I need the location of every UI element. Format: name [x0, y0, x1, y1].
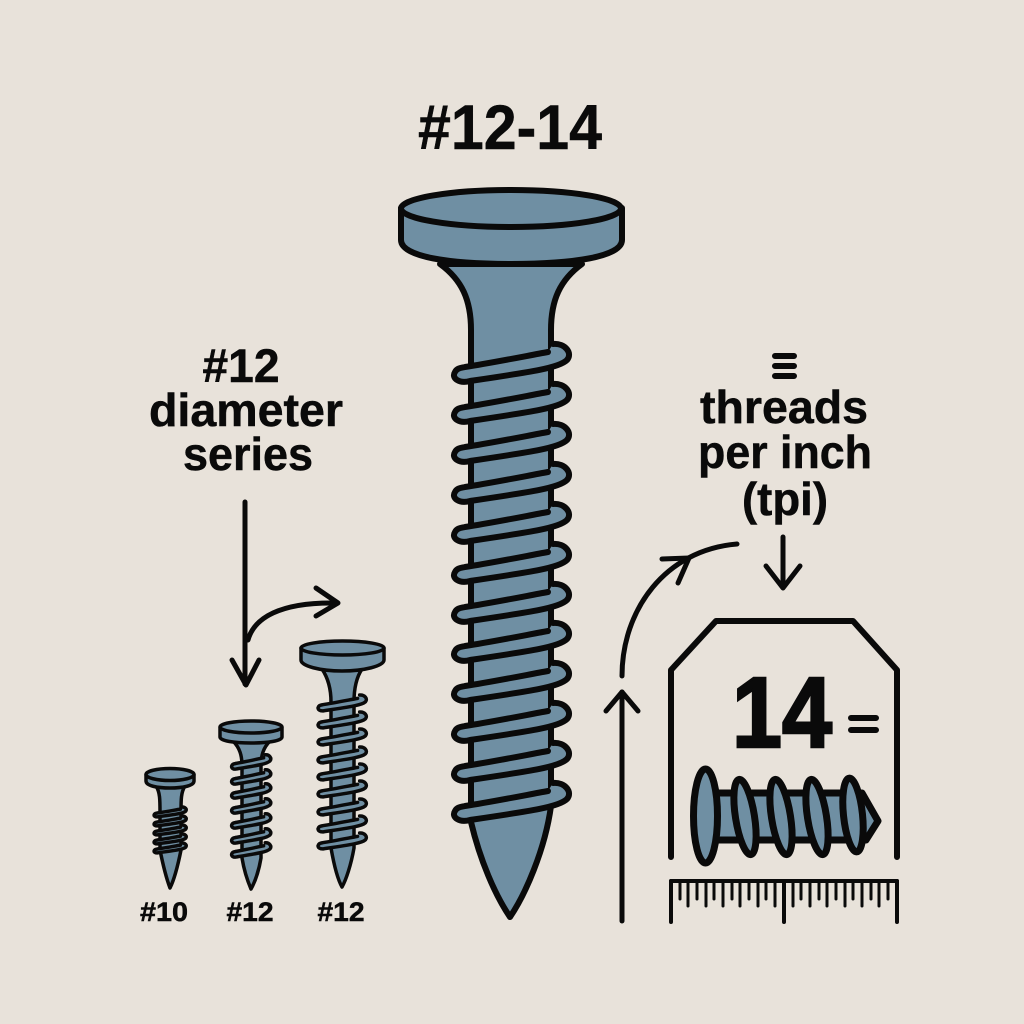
ruler: [671, 881, 897, 922]
panel: tag outline: [671, 621, 897, 857]
arrow: diameter down with branch: [232, 502, 338, 685]
heading: diameter series: #12: [202, 339, 280, 392]
number: 14: 14: [732, 657, 832, 769]
icon: small screw #10: [146, 768, 194, 888]
icon: large screw: [401, 190, 622, 917]
arrow: tall upward curved: [606, 544, 737, 921]
heading: diameter series: diameter: [149, 384, 343, 436]
icon: medium screw #12: [301, 641, 384, 887]
heading: diameter series: series: [183, 428, 313, 480]
heading: threads per inch: threads: [700, 381, 868, 433]
heading: threads per inch: [698, 356, 872, 525]
icon: small screw #12: [220, 721, 282, 889]
arrow: tpi down: [766, 537, 800, 588]
heading: threads per inch: per inch: [698, 426, 872, 478]
label: #12 medium: #12: [318, 897, 364, 927]
heading: diameter series: [149, 339, 343, 480]
title: #12-14: [418, 93, 602, 163]
icon: horizontal screw: [694, 769, 878, 863]
heading: threads per inch: (tpi): [742, 473, 828, 525]
icon: equals: [851, 718, 876, 730]
label: #12 small: #12: [226, 897, 274, 927]
label: #10: #10: [140, 897, 188, 927]
